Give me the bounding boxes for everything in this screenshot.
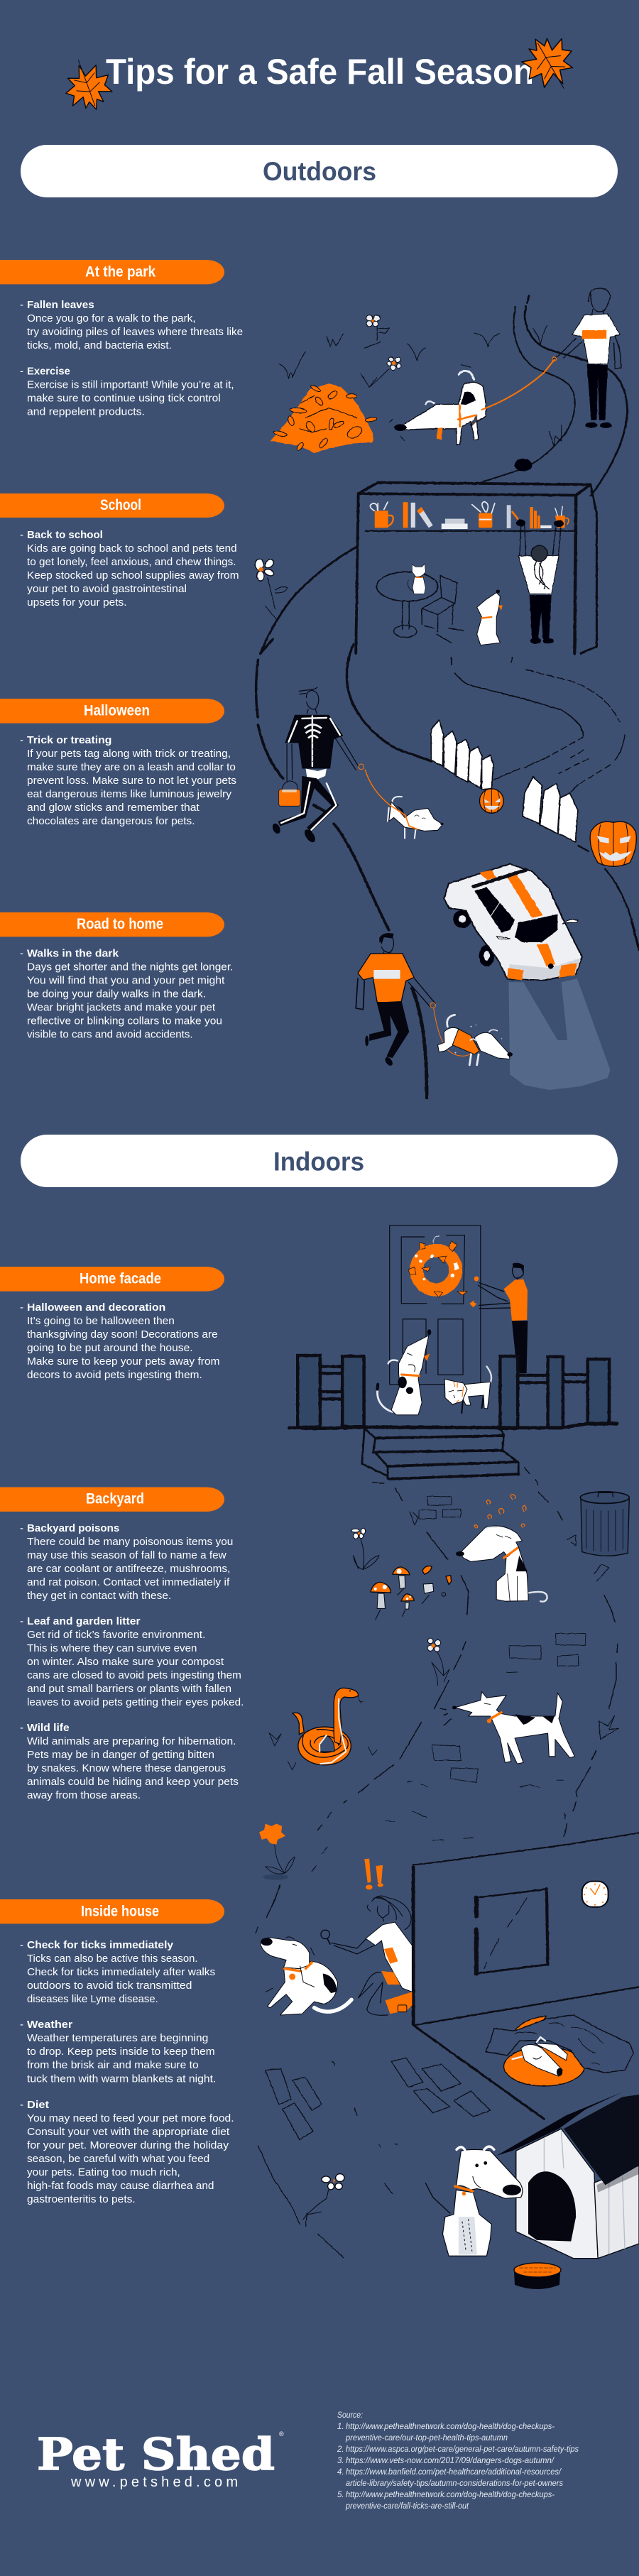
text block: inside house: Check for ticks immediately after walks [27,1966,215,1978]
text block: backyard: away from those areas. [27,1789,141,1801]
icon: striped cat [444,1367,491,1413]
text block: school [20,529,239,608]
icon: dog in reflective vest: + [470,1025,473,1030]
path marks and stones [266,1576,618,1916]
text block: halloween: Trick or treating [27,734,111,746]
heading: halloween: Halloween [84,703,150,719]
icon: skeleton man [271,687,364,844]
sources: 4. [337,2468,344,2477]
icon: snake [269,1688,377,1770]
sources: https://www.vets-now.com/2017/09/dangers-dogs-autumn/ [346,2457,555,2465]
text block: inside house: high-fat foods may cause diarrhea and [27,2180,214,2192]
text block: backyard: Backyard poisons [27,1522,119,1534]
text block: inside house: - [20,2019,23,2031]
icon: small pumpkin [479,789,503,813]
icon: food bowl [514,2263,561,2289]
text block: at the park: - [20,365,23,378]
heading: home facade [0,1267,224,1292]
text block: school: Back to school [27,529,103,541]
text block: inside house: Diet [27,2099,49,2111]
heading: inside house: Inside house [81,1903,159,1920]
sources: Source: [337,2411,363,2420]
icon: white sports car [444,864,582,980]
icon: dog in reflective vest [438,1015,513,1065]
illustration: halloween street [256,640,639,949]
text block: backyard: - [20,1722,23,1734]
text block: inside house: for your pet. Moreover during the holiday [27,2139,229,2151]
text block: inside house: gastroenteritis to pets. [27,2193,136,2205]
panel: bookshelf [356,483,596,653]
icon: porch steps [362,1429,518,1479]
text block: backyard: This is where they can survive even [27,1642,197,1654]
icon: sleeping dog [513,2037,567,2076]
sources: 3. [337,2457,344,2465]
logo: pet shed: ® [279,2430,284,2438]
icon: mushrooms [371,1566,452,1620]
text block: backyard [20,1522,244,1801]
text block: home facade: It’s going to be halloween then [27,1315,175,1327]
icon: dog looking up [477,589,503,645]
text block: backyard: Get rid of tick’s favorite environment. [27,1629,205,1641]
icon: right maple leaf [513,26,586,101]
sources: https://www.banfield.com/pet-healthcare/additional-resources/ [346,2468,562,2477]
text block: inside house: your pets. Eating too much rich, [27,2166,180,2178]
illustration: inside house [256,1833,639,2259]
text block: at the park: ticks, mold, and bacteria exist. [27,339,172,351]
icon: left maple leaf [57,52,118,117]
icon: wreath [408,1236,467,1297]
icon: dog in reflective vest: + [475,1024,477,1027]
text block: backyard: - [20,1522,23,1534]
text block: at the park: try avoiding piles of leaves where threats like [27,326,243,338]
sources: article-library/safety-tips/autumn-considerations-for-pet-owners [346,2479,563,2488]
sources: https://www.aspca.org/pet-care/general-pet-care/autumn-safety-tips [346,2445,579,2454]
text block: road to home: visible to cars and avoid accidents. [27,1028,193,1041]
text block: halloween: If your pets tag along with trick or treating, [27,748,231,760]
heading: school [0,493,224,518]
text block: inside house: season, be careful with what you feed [27,2153,209,2165]
text block: inside house: Weather temperatures are beginning [27,2032,208,2044]
heading: school: School [100,497,141,513]
icon: exclamation marks [364,1859,383,1889]
text block: inside house: tuck them with warm blankets at night. [27,2073,216,2085]
icon: dizzy swirls [474,1495,526,1528]
text block: home facade: decors to avoid pets ingesting them. [27,1369,202,1381]
icon: spotted dog looking at wreath [378,1329,431,1415]
text block: at the park: - [20,299,23,311]
text block: home facade: going to be put around the house. [27,1342,193,1354]
text block: school: Kids are going back to school and pets tend [27,542,237,555]
text block: backyard: cans are closed to avoid pets ingesting them [27,1669,241,1681]
sources: preventive-care/our-top-pet-health-tips-autumn [345,2434,508,2443]
text block: school: upsets for your pets. [27,596,127,608]
text block: home facade [20,1301,220,1381]
icon: child reaching for shelf [516,520,564,644]
text block: school: your pet to avoid gastrointestinal [27,583,187,595]
text block: inside house: diseases like Lyme disease. [27,1993,158,2005]
text block: backyard: they get in contact with these. [27,1590,171,1602]
text block: inside house: to drop. Keep pets inside to keep them [27,2046,215,2058]
text block: backyard: leaves to avoid pets getting their eyes poked. [27,1696,244,1708]
section banner: indoors [21,1135,618,1187]
heading: backyard [0,1487,224,1512]
icon: big pumpkin [590,822,636,866]
text block: backyard: by snakes. Know where these dangerous [27,1762,226,1774]
text block: at the park: Fallen leaves [27,299,94,311]
illustration: park and school [255,288,627,653]
text block: school: - [20,529,23,541]
text block: home facade: Make sure to keep your pets away from [27,1355,220,1368]
grass and flowers [255,315,561,619]
text block: road to home: Wear bright jackets and make your pet [27,1001,216,1014]
text block: road to home: Walks in the dark [27,947,119,960]
text block: backyard: Wild animals are preparing for hibernation. [27,1735,236,1747]
icon: sitting dog [425,2146,523,2256]
path marks and stones [373,1468,609,1581]
heading: inside house [0,1899,224,1923]
icon: orange flower [259,1824,295,1880]
sources: 2. [337,2445,344,2454]
leash [365,770,408,819]
text block: halloween: eat dangerous items like luminous jewelry [27,788,232,800]
text block: backyard: on winter. Also make sure your compost [27,1656,224,1668]
icon: dog house [496,2092,639,2259]
icon: dog bed with blanket [486,2015,633,2086]
sources: 1. [337,2423,344,2431]
road edges [334,824,427,1098]
logo: pet shed: Pet Shed [37,2428,275,2480]
text block: halloween: make sure they are on a leash and collar to [27,761,236,773]
text block: inside house: You may need to feed your pet more food. [27,2112,234,2124]
icon: dog in reflective vest: + [454,1051,457,1056]
icon: dizzy dog [456,1526,547,1602]
icon: wall clock [582,1882,608,1907]
text block: at the park [20,299,243,417]
text block: home facade: thanksgiving day soon! Decorations are [27,1328,218,1341]
icon: white cat [408,564,425,594]
sources: 5. [337,2491,344,2499]
text block: school: to get lonely, feel anxious, and chew things. [27,556,236,568]
text block: backyard: Pets may be in danger of getting bitten [27,1749,214,1761]
heading: at the park: At the park [85,264,155,280]
icon: scratching dog [261,1937,351,2015]
text block: inside house: Check for ticks immediately [27,1939,174,1951]
shelf items [370,501,569,529]
light beam [508,978,610,1090]
road edges [256,640,639,949]
text block: road to home: reflective or blinking collars to make you [27,1015,222,1027]
icon: trick or treat dog [388,797,443,839]
text block: halloween: - [20,734,23,746]
section banner: indoors: Indoors [273,1147,364,1176]
icon: man in orange shirt [356,933,435,1067]
text block: backyard: There could be many poisonous items you [27,1536,233,1548]
text block: backyard: are car coolant or antifreeze, mushrooms, [27,1563,230,1575]
text block: road to home: You will find that you and your pet might [27,974,225,987]
text block: backyard: animals could be hiding and keep your pets [27,1776,239,1788]
text block: inside house: outdoors to avoid tick transmitted [27,1980,192,1992]
illustration: walking home [334,824,513,1098]
text block: inside house: - [20,1939,23,1951]
text block: inside house: Consult your vet with the appropriate diet [27,2126,230,2138]
heading: backyard: Backyard [86,1491,144,1507]
sources: http://www.pethealthnetwork.com/dog-health/dog-checkups- [346,2423,555,2431]
icon: porch railing [290,1355,617,1429]
text block: backyard: - [20,1615,23,1627]
icon: window [476,1889,548,1973]
logo: pet shed: www.petshed.com [70,2474,238,2490]
text block: at the park: and reppelent products. [27,406,145,417]
text block: at the park: Once you go for a walk to the park, [27,312,196,324]
text block: at the park: make sure to continue using tick control [27,392,221,405]
icon: trash can [580,1492,629,1556]
leash [434,1008,472,1056]
icon: small white flower [303,2174,344,2220]
illustration: backyard lower [259,1566,618,1916]
text block: school: Keep stocked up school supplies away from [27,569,239,582]
text block: halloween: prevent loss. Make sure to not let your pets [27,775,236,787]
text block: inside house: from the brisk air and make sure to [27,2059,199,2071]
text block: backyard: Wild life [27,1722,70,1734]
text block: halloween: and glow sticks and remember that [27,802,200,814]
icon: dog in reflective vest: + [501,1038,503,1042]
text block: inside house: Ticks can also be active this season. [27,1953,197,1965]
text block: halloween [20,734,236,827]
illustration: backyard upper [351,1468,629,1602]
sources [337,2411,579,2511]
icon: girl with magnifying glass [256,1874,412,2015]
stepping stones [256,1885,491,2258]
icon: flower on path [427,1638,449,1686]
icon: white flower with leaves [351,1528,379,1569]
heading: home facade: Home facade [80,1271,161,1287]
text block: road to home: - [20,947,23,960]
wall and floor [413,1833,639,2119]
text block: backyard: and rat poison. Contact vet immediately if [27,1576,230,1588]
text block: inside house: Weather [27,2019,72,2031]
icon: barking dog [452,1692,574,1764]
heading: road to home: Road to home [77,916,163,932]
road edges [261,295,627,653]
text block: halloween: chocolates are dangerous for pets. [27,815,195,827]
icon: door [390,1226,481,1385]
text block: at the park: Exercise is still important! While you’re at it, [27,379,234,391]
title: Tips for a Safe Fall Season [106,52,534,92]
text block: road to home: be doing your daily walks in the dark. [27,988,206,1000]
text block: inside house [20,1939,234,2205]
text block: road to home: Days get shorter and the nights get longer. [27,961,233,973]
icon: leaf pile [271,383,377,453]
sources: http://www.pethealthnetwork.com/dog-health/dog-checkups- [346,2491,555,2499]
text block: inside house: - [20,2099,23,2111]
text block: backyard: may use this season of fall to name a few [27,1549,226,1561]
heading: at the park [0,260,224,284]
text block: backyard: Leaf and garden litter [27,1615,141,1627]
leash [482,359,555,410]
icon: man in white shirt [552,288,621,428]
icon: fence pickets [431,720,578,842]
section banner: outdoors [21,145,618,197]
heading: road to home [0,912,224,937]
section banner: outdoors: Outdoors [263,157,376,186]
text block: home facade: - [20,1301,23,1314]
heading: halloween [0,699,224,724]
icon: table and chair [376,572,464,643]
text block: at the park: Exercise [27,365,70,378]
icon: man hanging wreath [469,1263,528,1373]
illustration: house front [290,1226,617,1479]
icon: sniffing dog [390,365,486,444]
text block: road to home [20,947,233,1041]
sources: preventive-care/fall-ticks-are-still-out [345,2502,469,2511]
text block: home facade: Halloween and decoration [27,1301,165,1314]
text block: backyard: and put small barriers or plants with fallen [27,1683,231,1695]
